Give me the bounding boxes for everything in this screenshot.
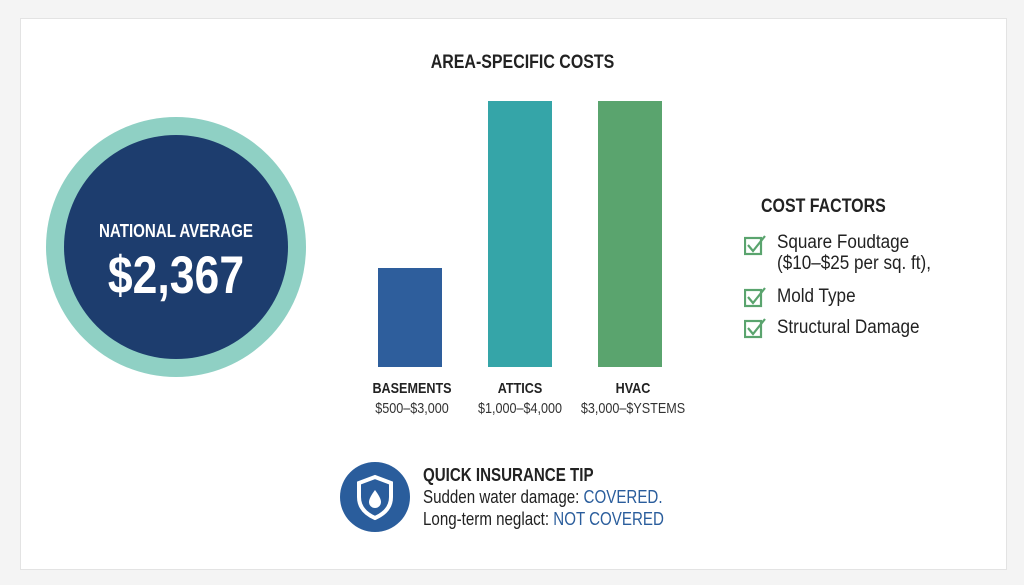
- chart title: AREA-SPECIFIC COSTS: [431, 52, 614, 73]
- cost factors: ($10–$25 per sq. ft),: [777, 253, 931, 274]
- text: $500–$3,000: [375, 400, 449, 417]
- bar chart: [378, 101, 662, 367]
- cost factors: Structural Damage: [777, 317, 920, 338]
- cost factors: Square Foudtage: [777, 232, 909, 253]
- labels: BASEMENTS: [372, 380, 452, 397]
- insurance tip: QUICK INSURANCE TIP: [423, 465, 594, 485]
- text: HVAC: [616, 380, 650, 397]
- label: NATIONAL AVERAGE: [99, 221, 253, 241]
- insurance tip: Long-term neglact: NOT COVERED: [423, 509, 664, 529]
- bar: basements: [378, 268, 442, 367]
- cost factors: [744, 196, 931, 338]
- bar: hvac: [598, 101, 662, 367]
- national average circle: [46, 117, 306, 377]
- value: $2,367: [108, 246, 244, 305]
- insurance tip: Sudden water damage: COVERED.: [423, 487, 663, 507]
- text: $1,000–$4,000: [478, 400, 562, 417]
- insurance tip: [423, 465, 664, 529]
- text: ATTICS: [498, 380, 542, 397]
- bar: attics: [488, 101, 552, 367]
- cost factors: COST FACTORS: [761, 196, 886, 217]
- text: $3,000–$YSTEMS: [581, 400, 685, 417]
- cost factors: Mold Type: [777, 286, 856, 307]
- icon: shield: [340, 462, 410, 532]
